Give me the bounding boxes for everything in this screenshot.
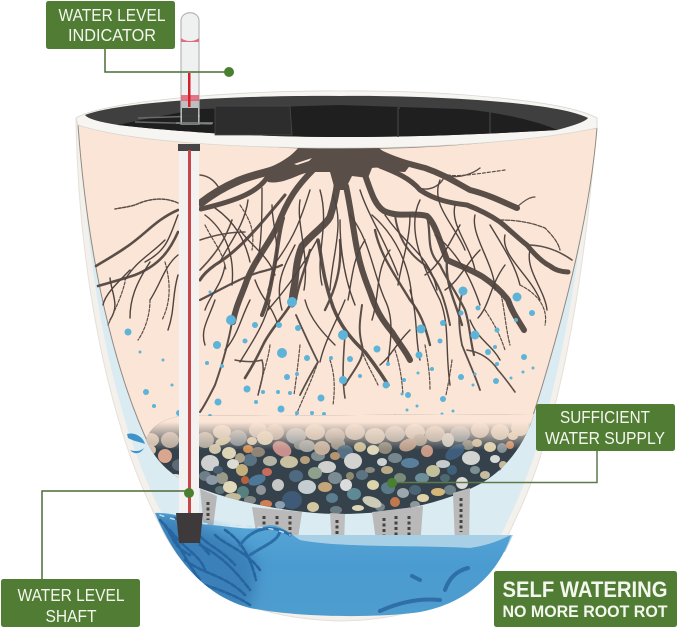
label: water level indicator: INDICATOR [68,25,156,45]
white rim [76,91,597,148]
planter pot [76,118,597,621]
water droplets [124,286,535,420]
water surface band [190,535,513,552]
pot rim [76,91,597,148]
badge: self watering [494,571,677,627]
slots [208,498,461,538]
label: sufficient water supply: WATER SUPPLY [545,428,665,448]
root system [96,148,572,418]
dark interior [85,96,588,137]
stone fade into soil [146,414,534,449]
colored stones [144,431,518,512]
background stones [141,420,529,514]
label: sufficient water supply [536,404,675,451]
tray opening [215,106,292,135]
label: water level shaft: WATER LEVEL [18,585,125,605]
shaft cap [178,144,200,151]
label: water level indicator: WATER LEVEL [58,5,166,25]
label: water level shaft [1,579,140,627]
shaft tube [179,148,199,516]
pot body [76,118,597,621]
peach cutaway panel [78,125,597,484]
reservoir lining [82,140,592,615]
badge: self watering: NO MORE ROOT ROT [502,603,668,621]
water splash on wall [127,434,145,453]
dashed rootlets [108,205,546,418]
label: water level shaft: SHAFT [46,606,97,626]
clear tube [181,13,199,124]
leader line: water level indicator [105,49,234,77]
shaft foot [176,513,203,543]
water body [155,513,511,616]
turbulent dark water [150,510,468,612]
inner reservoir tray [118,105,557,137]
leader line: water level shaft [42,488,194,579]
water level indicator tube [176,13,213,124]
badge: self watering: SELF WATERING [502,577,668,602]
fine rootlets [103,180,547,385]
root crown [262,148,412,190]
pink scale mark [181,38,199,42]
pink lower mark [181,95,199,101]
thick roots [201,168,280,203]
wicking legs [200,488,470,548]
label: water level indicator [46,1,175,49]
water level shaft [176,144,203,543]
label: sufficient water supply: SUFFICIENT [560,407,650,427]
leader line: sufficient water supply [387,451,597,488]
crown opening [294,158,312,165]
red float [188,73,190,107]
tube base [182,108,198,124]
stone drainage layer [146,414,534,514]
water reservoir [127,434,513,616]
shaft float rod [188,150,191,514]
stone base [146,414,534,514]
